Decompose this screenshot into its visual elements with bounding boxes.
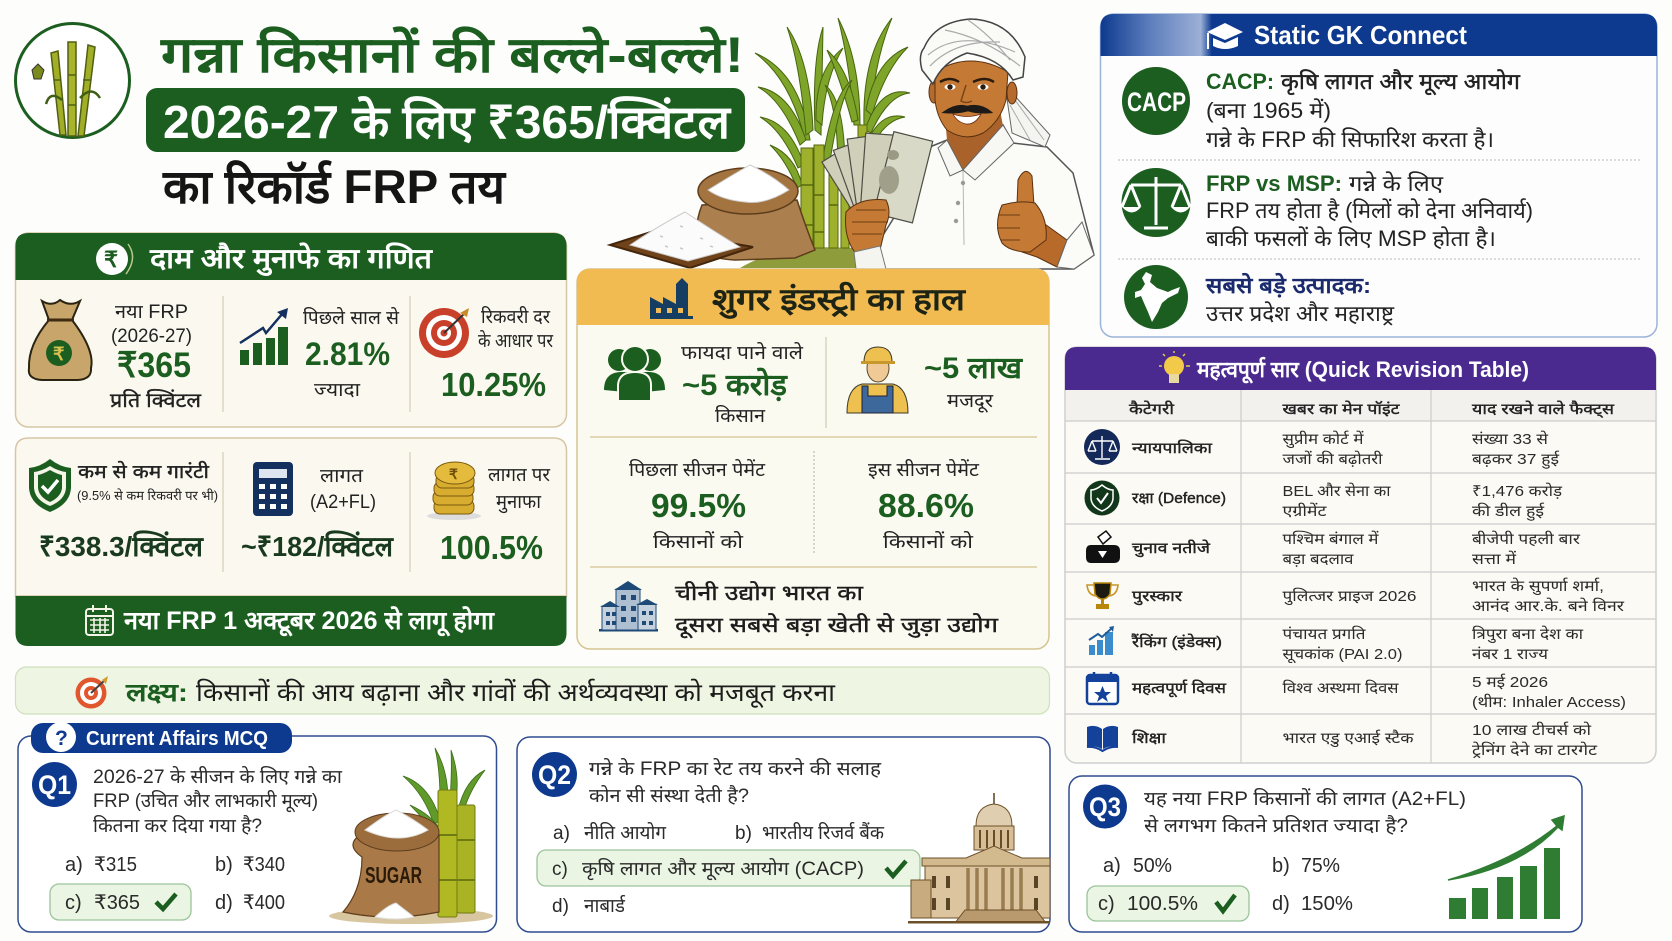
text: largest producers: सबसे बड़े उत्पादक: — [1205, 272, 1371, 298]
banner: effective date: नया FRP 1 अक्टूबर 2026 से लागू होगा — [123, 606, 496, 637]
stat: minimum guarantee: कम से कम गारंटी — [78, 460, 210, 483]
stat: profit 100.5 percent — [440, 465, 551, 566]
panel: guarantee cost profit — [16, 438, 566, 646]
badge: Q1 — [32, 762, 77, 807]
options: 150% — [1301, 893, 1353, 915]
options: कृषि लागत और मूल्य आयोग (CACP) — [582, 857, 864, 881]
question text — [93, 765, 343, 837]
question text: गन्ने के FRP का रेट तय करने की सलाह — [589, 757, 882, 780]
text: FRP vs MSP: बाकी फसलों के लिए MSP होता है। — [1206, 226, 1496, 251]
text: CACP — [1206, 69, 1521, 152]
goal banner: किसानों की आय बढ़ाना और गांवों की अर्थव्यवस्था को मजबूत करना — [196, 678, 836, 708]
row: judiciary — [1084, 429, 1560, 469]
stat: 2.81 percent: ज्यादा — [314, 380, 361, 401]
icon: buildings — [599, 581, 658, 632]
stat: cost A2+FL — [241, 466, 394, 562]
row: awards: पुलित्जर प्राइज 2026 — [1282, 587, 1416, 606]
row: education — [1087, 721, 1598, 759]
stat: new FRP 365: (2026-27) — [111, 326, 192, 347]
options: b) — [735, 823, 752, 844]
stat: profit 100.5 percent: 100.5% — [440, 529, 543, 566]
text: second largest agro industry: दूसरा सबसे बड़ा खेती से जुड़ा उद्योग — [675, 613, 999, 639]
question text: कितना कर दिया गया है? — [93, 814, 262, 837]
options: 50% — [1133, 855, 1172, 877]
panel header: ₹ — [104, 247, 118, 272]
stat: last season payment: किसानों को — [653, 530, 744, 553]
illustration: sugar sack and cane: SUGAR — [365, 862, 422, 888]
stat: cost A2+FL: लागत — [320, 466, 364, 487]
shirt — [858, 125, 1094, 269]
row: awards: आनंद आर.के. बने विनर — [1472, 597, 1625, 615]
stat: new FRP 365: नया FRP — [115, 302, 188, 323]
sack — [697, 200, 815, 260]
stat: 5 lakh workers: ~5 लाख — [924, 352, 1023, 385]
options: ₹365 — [94, 892, 140, 914]
row: important day — [1087, 672, 1626, 711]
text: FRP vs MSP: FRP तय होता है (मिलों को देना अनिवार्य) — [1206, 198, 1533, 223]
stat: this season payment — [868, 458, 979, 553]
row: election results: पश्चिम बंगाल में — [1282, 530, 1380, 548]
options — [50, 854, 285, 920]
row: ranking: नंबर 1 राज्य — [1472, 646, 1548, 663]
text: CACP: CACP: — [1206, 69, 1274, 94]
table header: महत्वपूर्ण सार (Quick Revision Table) — [1196, 356, 1529, 384]
icon: India map circle — [1124, 265, 1188, 329]
stat: this season payment: किसानों को — [883, 530, 974, 553]
options: b) — [215, 854, 233, 876]
stat: 2.81 percent: 2.81% — [305, 336, 390, 372]
options: a) — [553, 823, 570, 844]
icon: CACP circle — [1122, 67, 1190, 135]
neck and collar — [945, 110, 1003, 170]
row: defence: रक्षा (Defence) — [1132, 490, 1226, 507]
stat: 5 crore farmers: किसान — [715, 404, 765, 427]
stat: minimum guarantee: (9.5% से कम रिकवरी पर भी) — [77, 488, 218, 503]
question text: कोन सी संस्था देती है? — [589, 784, 749, 807]
icon: coin stack: ₹ — [449, 466, 458, 482]
money fan — [822, 132, 933, 225]
row: awards — [1087, 577, 1625, 615]
turban tail — [1005, 85, 1050, 147]
row: election results: बीजेपी पहली बार — [1472, 530, 1581, 548]
row: defence: ₹1,476 करोड़ — [1472, 482, 1563, 500]
mcq panel: Q3 — [1069, 776, 1582, 932]
panel header — [577, 269, 1049, 325]
row: ranking: त्रिपुरा बना देश का — [1472, 625, 1584, 644]
goal banner — [16, 667, 1050, 714]
options: d) — [215, 892, 233, 914]
row: awards: पुरस्कार — [1132, 588, 1183, 606]
icon: coin stack — [427, 462, 481, 520]
table column headings: याद रखने वाले फैक्ट्स — [1472, 400, 1615, 418]
stat: 5 lakh workers: मजदूर — [947, 391, 994, 413]
row: election results: चुनाव नतीजे — [1132, 539, 1211, 558]
stat: last season payment: 99.5% — [651, 487, 746, 524]
text: FRP vs MSP: गन्ने के लिए — [1349, 171, 1444, 196]
text: FRP vs MSP: FRP vs MSP: — [1206, 171, 1342, 196]
text: second largest agro industry — [675, 581, 999, 639]
goal banner: लक्ष्य: — [125, 679, 188, 707]
stat: minimum guarantee: ₹338.3/क्विंटल — [39, 530, 204, 562]
panel header: Static GK Connect — [1254, 20, 1467, 50]
options: ₹400 — [243, 892, 285, 914]
title line 1: गन्ना किसानों की बल्ले-बल्ले! — [160, 26, 744, 83]
question text — [1144, 787, 1466, 837]
mcq panel: Q2 — [517, 737, 1050, 932]
stat: 5 crore farmers: ~5 करोड़ — [682, 367, 788, 402]
icon: light bulb — [1159, 351, 1190, 383]
row: education: शिक्षा — [1132, 729, 1167, 747]
panel header: शुगर इंडस्ट्री का हाल — [712, 281, 966, 319]
stat: minimum guarantee — [39, 460, 218, 562]
logo: sugarcane badge — [16, 24, 130, 138]
options: a) — [65, 854, 83, 876]
row: election results: सत्ता में — [1472, 550, 1517, 568]
row: important day: (थीम: Inhaler Access) — [1472, 693, 1626, 711]
banner: effective date — [16, 596, 566, 646]
stat: 2.81 percent: पिछले साल से — [303, 306, 400, 329]
panel: Static GK Connect — [1100, 14, 1657, 337]
illustration: government building — [908, 793, 1050, 924]
icon: calendar — [86, 605, 113, 635]
options: नाबार्ड — [584, 894, 626, 917]
icon: farmers group — [604, 346, 665, 401]
row: judiciary: बढ़कर 37 हुई — [1472, 450, 1560, 469]
tray with sugar — [610, 230, 753, 268]
face — [935, 61, 1008, 137]
panel header — [16, 233, 566, 280]
row: defence: BEL और सेना का — [1282, 482, 1392, 500]
panel header: दाम और मुनाफे का गणित — [149, 242, 433, 276]
options: ₹315 — [94, 854, 137, 876]
question text — [589, 757, 882, 807]
options — [1087, 855, 1353, 921]
illustration: farmer with sugarcane and sugar sacks — [610, 18, 1094, 269]
stat: new FRP 365: ₹365 — [117, 346, 191, 385]
row: ranking: रैंकिंग (इंडेक्स) — [1131, 633, 1222, 651]
table: quick revision — [1065, 347, 1656, 763]
stat: 5 crore farmers: फायदा पाने वाले — [681, 341, 804, 364]
row: election results — [1086, 530, 1581, 568]
row: judiciary: न्यायपालिका — [1132, 439, 1213, 457]
thumbs-up hand and arm — [1022, 222, 1067, 267]
stat: last season payment — [629, 458, 765, 553]
options — [537, 821, 920, 917]
stat: 5 crore farmers — [681, 341, 804, 427]
icon: growth chart — [240, 308, 288, 365]
illustration: sugar sack and cane — [329, 748, 493, 924]
stat: cost A2+FL: ~₹182/क्विंटल — [241, 530, 394, 562]
options: ₹340 — [243, 854, 285, 876]
icon: target — [419, 308, 469, 358]
row: defence — [1084, 480, 1563, 521]
row: judiciary: सुप्रीम कोर्ट में — [1282, 430, 1365, 449]
row: education: भारत एडु एआई स्टैक — [1282, 729, 1414, 748]
row: awards: भारत के सुपर्णा शर्मा, — [1472, 577, 1604, 596]
mcq panel: Q1 — [18, 722, 496, 932]
row: important day: 5 मई 2026 — [1472, 673, 1548, 691]
title line 3: का रिकॉर्ड FRP तय — [162, 160, 507, 213]
table header — [1065, 347, 1656, 390]
options: c) — [65, 892, 82, 914]
table column headings: कैटेगरी — [1129, 400, 1175, 418]
row: ranking: सूचकांक (PAI 2.0) — [1282, 646, 1402, 664]
icon: money bag — [29, 300, 92, 380]
chart: rising bars with arrow — [1448, 816, 1564, 919]
stat: recovery 10.25 percent — [441, 305, 554, 403]
stat: this season payment: इस सीजन पेमेंट — [868, 458, 979, 481]
icon: scales circle — [1122, 168, 1190, 237]
icon: shield — [29, 459, 71, 512]
question text: FRP (उचित और लाभकारी मूल्य) — [93, 789, 318, 813]
text: largest producers — [1205, 272, 1395, 326]
hand with money — [846, 200, 889, 256]
question text: 2026-27 के सीजन के लिए गन्ने का — [93, 765, 343, 788]
tab: Current Affairs MCQ — [31, 722, 292, 753]
row: judiciary: संख्या 33 से — [1472, 430, 1549, 448]
row: important day: महत्वपूर्ण दिवस — [1132, 679, 1227, 698]
icon: graduation cap — [1207, 23, 1243, 49]
ears — [929, 81, 939, 103]
text: CACP: कृषि लागत और मूल्य आयोग — [1281, 69, 1521, 96]
row: judiciary: जजों की बढ़ोतरी — [1282, 450, 1384, 468]
stat: recovery 10.25 percent: के आधार पर — [478, 329, 554, 352]
badge: Q3: Q3 — [1089, 792, 1121, 822]
panel header — [1100, 14, 1657, 56]
badge: Q3 — [1083, 784, 1127, 828]
icon: money bag: ₹ — [53, 344, 65, 364]
badge: Q2 — [532, 752, 577, 797]
panel: sugar industry status — [577, 269, 1049, 649]
row: defence: की डील हुई — [1472, 502, 1545, 521]
title banner: 2026-27 FRP: 2026-27 के लिए ₹365/क्विंटल — [163, 96, 732, 148]
stat: 5 lakh workers — [924, 352, 1023, 413]
text: FRP vs MSP — [1206, 171, 1533, 251]
tab: Current Affairs MCQ: Current Affairs MCQ — [86, 728, 268, 750]
hair and turban — [945, 18, 1000, 36]
badge: Q1: Q1 — [38, 770, 71, 800]
question text: यह नया FRP किसानों की लागत (A2+FL) — [1144, 787, 1466, 810]
options: b) — [1272, 855, 1290, 877]
options: 75% — [1301, 855, 1340, 877]
icon: worker — [847, 347, 908, 413]
row: election results: बड़ा बदलाव — [1282, 551, 1354, 568]
options: c) — [1098, 893, 1115, 915]
tab: Current Affairs MCQ: ? — [55, 727, 68, 750]
stat: last season payment: पिछला सीजन पेमेंट — [629, 458, 765, 481]
stat: recovery 10.25 percent: रिकवरी दर — [481, 305, 551, 328]
text: second largest agro industry: चीनी उद्योग भारत का — [675, 581, 864, 605]
badge: Q2: Q2 — [538, 760, 571, 790]
options: c) — [552, 859, 568, 880]
icon: CACP circle: CACP — [1127, 87, 1186, 117]
row: defence: एग्रीमेंट — [1282, 502, 1327, 520]
stat: profit 100.5 percent: लागत पर — [488, 465, 551, 486]
options: d) — [552, 896, 569, 917]
icon: factory — [650, 278, 693, 319]
stat: new FRP 365 — [110, 302, 201, 412]
text: CACP: (बना 1965 में) — [1206, 98, 1331, 123]
stat: recovery 10.25 percent: 10.25% — [441, 366, 546, 403]
stat: this season payment: 88.6% — [878, 487, 974, 524]
options: d) — [1272, 893, 1290, 915]
options: 100.5% — [1127, 893, 1198, 915]
panel: price and profit math — [16, 233, 566, 427]
row: ranking: पंचायत प्रगति — [1282, 625, 1366, 643]
row: education: ट्रेनिंग देने का टारगेट — [1472, 741, 1598, 759]
table column headings — [1129, 400, 1615, 418]
stat: cost A2+FL: (A2+FL) — [310, 492, 376, 513]
stat: new FRP 365: प्रति क्विंटल — [110, 389, 201, 412]
icon: calculator — [253, 462, 293, 516]
question text: से लगभग कितने प्रतिशत ज्यादा है? — [1144, 814, 1408, 837]
row: education: 10 लाख टीचर्स को — [1472, 721, 1592, 739]
table column headings: खबर का मेन पॉइंट — [1282, 400, 1400, 418]
options: a) — [1103, 855, 1121, 877]
stat: profit 100.5 percent: मुनाफा — [496, 492, 542, 514]
options: नीति आयोग — [584, 821, 666, 844]
text: CACP: गन्ने के FRP की सिफारिश करता है। — [1206, 127, 1494, 152]
icon: goal target — [76, 676, 108, 708]
row: ranking — [1089, 625, 1584, 664]
text: largest producers: उत्तर प्रदेश और महाराष्ट्र — [1206, 301, 1395, 326]
row: important day: विश्व अस्थमा दिवस — [1282, 679, 1399, 697]
stat: 2.81 percent — [303, 306, 400, 401]
options: भारतीय रिजर्व बैंक — [762, 821, 884, 844]
